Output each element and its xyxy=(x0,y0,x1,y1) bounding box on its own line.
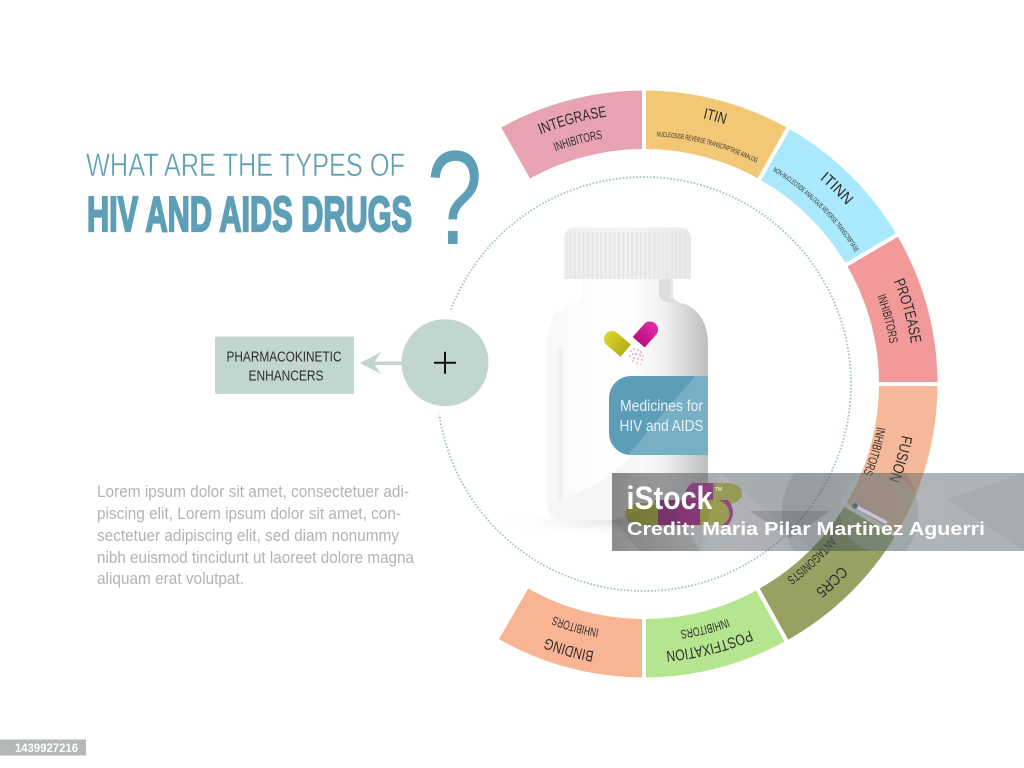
segment: postfixation xyxy=(644,588,787,680)
label: ccr5: CCR5 xyxy=(816,568,847,598)
bottle neck shade xyxy=(659,279,680,303)
arrow xyxy=(360,352,403,374)
gap stripe xyxy=(855,506,887,523)
band background xyxy=(612,473,1024,551)
icon: open capsule xyxy=(601,318,661,365)
enhancers text: ENHANCERS xyxy=(248,368,324,384)
title xyxy=(86,124,482,273)
pharmacokinetic enhancers callout xyxy=(215,319,488,406)
segment: fusion xyxy=(844,384,940,536)
label: binding: BINDING xyxy=(544,639,594,662)
label: protease: PROTEASE xyxy=(894,278,922,344)
bottle shadow xyxy=(495,507,745,537)
segment: protease xyxy=(845,234,940,384)
iStock logo: iStock xyxy=(626,480,713,516)
body text: sectetuer adipiscing elit, sed diam nonummy xyxy=(97,527,400,545)
label: fusion: FUSION xyxy=(889,436,912,483)
label highlight xyxy=(628,376,708,455)
segment: binding xyxy=(496,586,644,680)
trademark: TM xyxy=(715,487,722,493)
ring labels xyxy=(538,106,922,662)
label: integrase xyxy=(538,106,606,152)
image id tag: 1439927216 xyxy=(15,741,78,755)
body text: nibh euismod tincidunt ut laoreet dolore magna xyxy=(97,549,415,567)
enhancers box xyxy=(215,336,354,394)
label: binding: INHIBITORS xyxy=(552,616,598,638)
label: fusion xyxy=(864,428,912,483)
segment: ccr5 xyxy=(757,504,897,642)
segment: itinn xyxy=(758,127,899,266)
label: itin xyxy=(656,108,758,162)
icon: pills xyxy=(625,483,742,525)
label: ccr5 xyxy=(788,536,847,598)
bottle cap xyxy=(564,228,691,279)
label: itinn: NON-NUCLEOSIDE ANALOGUE REVERSE TRANSCRIPTASE xyxy=(773,167,860,252)
image id tag xyxy=(0,740,86,756)
plus circle xyxy=(402,319,488,406)
label: binding xyxy=(544,616,598,662)
bottle body xyxy=(547,279,708,520)
label: postfixation: INHIBITORS xyxy=(680,618,730,638)
iStock watermark band xyxy=(612,473,1024,551)
label: fusion: INHIBITORS xyxy=(864,428,886,476)
label: integrase: INTEGRASE xyxy=(538,106,606,134)
left highlight xyxy=(557,347,563,519)
question mark: ? xyxy=(426,124,482,273)
label text xyxy=(620,398,704,435)
label panel xyxy=(609,376,708,455)
body text xyxy=(97,483,415,588)
bottle xyxy=(495,228,745,537)
title line 2: HIV AND AIDS DRUGS xyxy=(87,188,412,242)
segment: integrase xyxy=(498,88,644,181)
body text: piscing elit, Lorem ipsum dolor sit amet, con- xyxy=(97,505,401,523)
enhancers text: PHARMACOKINETIC xyxy=(226,348,342,366)
label: ccr5: ANTAGONISTS xyxy=(788,536,836,584)
label: itin: NUCLEOSIDE REVERSE TRANSCRIPTASE ANALOG xyxy=(656,132,758,162)
credit line: Credit: Maria Pilar Martinez Aguerri xyxy=(627,519,985,539)
label: postfixation: POSTFIXATION xyxy=(667,630,754,662)
dotted ring xyxy=(439,177,851,591)
lower reflection xyxy=(547,455,640,520)
label: protease inhibitors: INHIBITORS xyxy=(877,294,898,343)
label: itinn: ITINN xyxy=(820,172,854,205)
body text: aliquam erat volutpat. xyxy=(97,570,244,588)
plus sign xyxy=(434,352,456,374)
enhancers text xyxy=(226,348,342,384)
title line 1: WHAT ARE THE TYPES OF xyxy=(86,147,405,183)
label text: Medicines for xyxy=(620,398,703,415)
ring segments xyxy=(496,88,940,680)
segment: itin xyxy=(644,88,789,181)
label text: HIV and AIDS xyxy=(620,418,704,435)
label: integrase: INHIBITORS xyxy=(553,130,602,152)
body text: Lorem ipsum dolor sit amet, consectetuer adi- xyxy=(97,483,409,501)
label: itin: ITIN xyxy=(704,108,727,124)
